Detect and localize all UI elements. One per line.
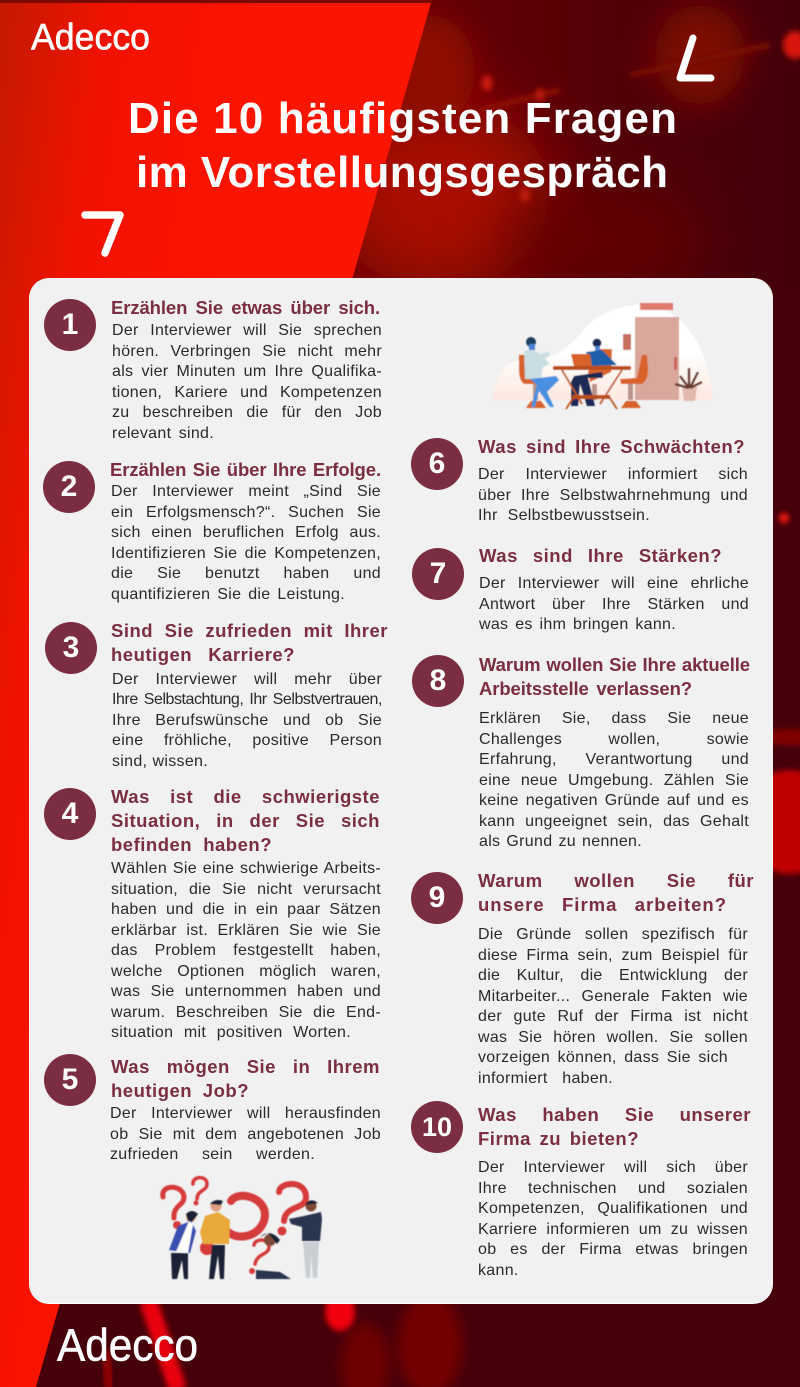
- text: question 4: situation mit positiven Worten.: [111, 1024, 351, 1041]
- text: question 3: sind, wissen.: [112, 752, 208, 770]
- text: question 3: [111, 620, 388, 770]
- question 10: [411, 1101, 751, 1278]
- text: question 4: das Problem festgestellt haben,: [111, 942, 381, 959]
- text: question 10: Karriere informieren um zu wissen: [478, 1220, 748, 1238]
- text: question 7: Antwort über Ihre Stärken und: [479, 596, 749, 612]
- text: question 8: Warum wollen Sie Ihre aktuelle: [479, 654, 750, 675]
- number 3: [45, 622, 97, 674]
- text: question 9: [478, 870, 754, 1086]
- question marks: [163, 1178, 306, 1264]
- text: question 9: Warum wollen Sie für: [478, 870, 754, 891]
- text: question 10: Ihre technischen und sozialen: [478, 1180, 748, 1196]
- text: question 1: Der Interviewer will Sie sprechen: [112, 322, 382, 339]
- text: question 4: warum. Beschreiben Sie die End-: [111, 1004, 381, 1020]
- illustration: people with question marks: [159, 1175, 323, 1280]
- text: question 8: Challenges wollen, sowie: [479, 730, 749, 748]
- text: question 3: Ihre Berufswünsche und ob Sie: [112, 712, 382, 728]
- number 9: 9: [429, 881, 445, 914]
- question 6: [411, 436, 748, 524]
- text: question 8: keine negativen Gründe auf und es: [479, 792, 749, 809]
- number 9: [411, 872, 463, 924]
- text: question 9: diese Firma sein, zum Beispiel für: [478, 946, 748, 964]
- text: question 7: [479, 545, 749, 633]
- number 2: [43, 461, 95, 513]
- question 5: [44, 1054, 381, 1163]
- text: question 3: Der Interviewer will mehr über: [112, 670, 382, 688]
- number 8: 8: [430, 664, 446, 697]
- number 1: [44, 299, 96, 351]
- number 7: 7: [430, 557, 446, 590]
- text: question 8: kann ungeeignet sein, das Gehalt: [479, 812, 749, 830]
- question 7: [412, 545, 749, 633]
- text: question 3: Ihre Selbstachtung, Ihr Selbstvertrauen,: [112, 691, 382, 708]
- question 1: [44, 297, 382, 442]
- question 9: [411, 870, 754, 1086]
- number 4: [44, 788, 96, 840]
- text: question 4: haben und die in ein paar Sätzen: [111, 901, 381, 918]
- text: question 3: heutigen Karriere?: [111, 644, 295, 665]
- question 2: [43, 459, 381, 602]
- text: question 1: zu beschreiben die für den Job: [112, 404, 382, 421]
- man: [592, 338, 602, 348]
- text: question 1: hören. Verbringen Sie nicht mehr: [112, 342, 382, 360]
- table: [553, 366, 631, 370]
- text: question 10: Firma zu bieten?: [478, 1128, 639, 1149]
- text: question 4: Wählen Sie eine schwierige Arbeits-: [111, 860, 381, 877]
- question 8: [412, 654, 750, 850]
- man yellow: [210, 1200, 222, 1212]
- text: question 3: eine fröhliche, positive Person: [112, 732, 382, 749]
- sitting person: [264, 1234, 276, 1246]
- number 10: [411, 1101, 463, 1153]
- text: question 9: die Kultur, die Entwicklung der: [478, 967, 748, 984]
- text: question 1: [111, 297, 382, 442]
- text: question 10: Kompetenzen, Qualifikationen und: [478, 1200, 748, 1217]
- text: question 6: [478, 436, 748, 524]
- text: question 6: Der Interviewer informiert sich: [478, 466, 748, 483]
- text: question 4: Was ist die schwierigste: [111, 786, 380, 807]
- text: question 9: informiert haben.: [478, 1070, 613, 1086]
- title: im Vorstellungsgespräch: [136, 148, 668, 197]
- text: question 7: Was sind Ihre Stärken?: [479, 545, 722, 566]
- number 2: 2: [61, 470, 77, 503]
- plant: [682, 387, 697, 401]
- text: question 9: was Sie hören wollen. Sie sollen: [478, 1028, 748, 1046]
- text: question 4: welche Optionen möglich waren,: [111, 962, 381, 980]
- text: question 4: Situation, in der Sie sich: [111, 810, 380, 831]
- text: question 5: [110, 1056, 381, 1163]
- text: question 1: relevant sind.: [112, 424, 214, 442]
- question 4: [44, 786, 381, 1041]
- text: question 2: Erzählen Sie über Ihre Erfolge.: [110, 459, 381, 480]
- text: question 4: befinden haben?: [111, 834, 272, 855]
- number 4: 4: [62, 797, 78, 830]
- number 6: [411, 438, 463, 490]
- number 1: 1: [62, 308, 78, 341]
- text: question 1: tionen, Kariere und Kompetenzen: [112, 384, 382, 400]
- text: question 9: unsere Firma arbeiten?: [478, 894, 727, 915]
- number 10: 10: [422, 1112, 452, 1142]
- man navy: [306, 1200, 316, 1212]
- text: question 2: quantifizieren Sie die Leistung.: [111, 586, 345, 602]
- text: question 7: Der Interviewer will eine ehrliche: [479, 575, 749, 592]
- text: question 8: als Grund zu nennen.: [479, 833, 642, 850]
- number 3: 3: [63, 631, 79, 664]
- text: question 3: Sind Sie zufrieden mit Ihrer: [111, 620, 388, 641]
- text: question 8: Erklären Sie, dass Sie neue: [479, 710, 749, 727]
- text: question 2: [110, 459, 381, 602]
- text: question 7: was es ihm bringen kann.: [479, 616, 676, 633]
- text: question 1: als vier Minuten um Ihre Qualifika-: [112, 363, 382, 380]
- text: question 10: [478, 1104, 751, 1278]
- text: question 4: situation, die Sie nicht verursacht: [111, 880, 381, 898]
- number 5: [44, 1054, 96, 1106]
- text: question 4: [111, 786, 381, 1041]
- text: question 10: Was haben Sie unserer: [478, 1104, 751, 1125]
- text: question 9: Mitarbeiter... Generale Fakten wie: [478, 988, 748, 1004]
- text: question 5: heutigen Job?: [111, 1080, 249, 1101]
- text: question 1: Erzählen Sie etwas über sich.: [111, 297, 380, 318]
- text: question 2: Der Interviewer meint „Sind Sie: [111, 483, 381, 500]
- text: question 10: ob es der Firma etwas bringen: [478, 1241, 748, 1258]
- text: question 8: Erfahrung, Verantwortung und: [479, 751, 749, 768]
- text: question 5: Was mögen Sie in Ihrem: [111, 1056, 380, 1077]
- text: question 2: Identifizieren Sie die Kompetenzen,: [111, 544, 381, 562]
- text: question 4: was Sie unternommen haben und: [111, 983, 381, 1000]
- woman: [526, 337, 536, 347]
- panel: questions card: [29, 278, 773, 1303]
- text: question 10: kann.: [478, 1262, 519, 1278]
- text: question 2: die Sie benutzt haben und: [111, 565, 381, 582]
- text: question 9: vorzeigen können, dass Sie sich: [478, 1049, 728, 1066]
- illustration: interview in office: [493, 302, 712, 410]
- text: question 9: Die Gründe sollen spezifisch für: [478, 926, 748, 943]
- text: question 6: Ihr Selbstbewusstsein.: [478, 507, 650, 524]
- chairs: [519, 355, 547, 384]
- text: question 8: [479, 654, 750, 850]
- number 7: [412, 548, 464, 600]
- text: question 5: ob Sie mit dem angebotenen Job: [110, 1126, 381, 1142]
- number 8: [412, 655, 464, 707]
- text: question 5: Der Interviewer will herausfinden: [110, 1105, 381, 1122]
- text: question 4: erklärbar ist. Erklären Sie wie Sie: [111, 922, 381, 938]
- number 5: 5: [62, 1063, 78, 1096]
- icon: corner mark top right: [676, 34, 714, 82]
- text: question 5: zufrieden sein werden.: [110, 1146, 315, 1163]
- title: Die 10 häufigsten Fragen: [128, 94, 677, 143]
- number 6: 6: [429, 447, 445, 480]
- text: question 8: eine neue Umgebung. Zählen Sie: [479, 772, 749, 788]
- text: question 6: über Ihre Selbstwahrnehmung und: [478, 486, 748, 504]
- woman: [186, 1212, 196, 1222]
- text: question 6: Was sind Ihre Schwächten?: [478, 436, 745, 457]
- text: question 9: der gute Ruf der Firma ist nicht: [478, 1008, 748, 1025]
- text: question 10: Der Interviewer will sich über: [478, 1159, 748, 1176]
- question 3: [45, 620, 388, 770]
- text: question 8: Arbeitsstelle verlassen?: [479, 678, 692, 699]
- text: question 2: ein Erfolgsmensch?“. Suchen Sie: [111, 504, 381, 520]
- icon: corner mark left: [81, 211, 124, 257]
- text: question 2: sich einen beruflichen Erfolg aus.: [111, 524, 381, 541]
- title: [128, 94, 677, 197]
